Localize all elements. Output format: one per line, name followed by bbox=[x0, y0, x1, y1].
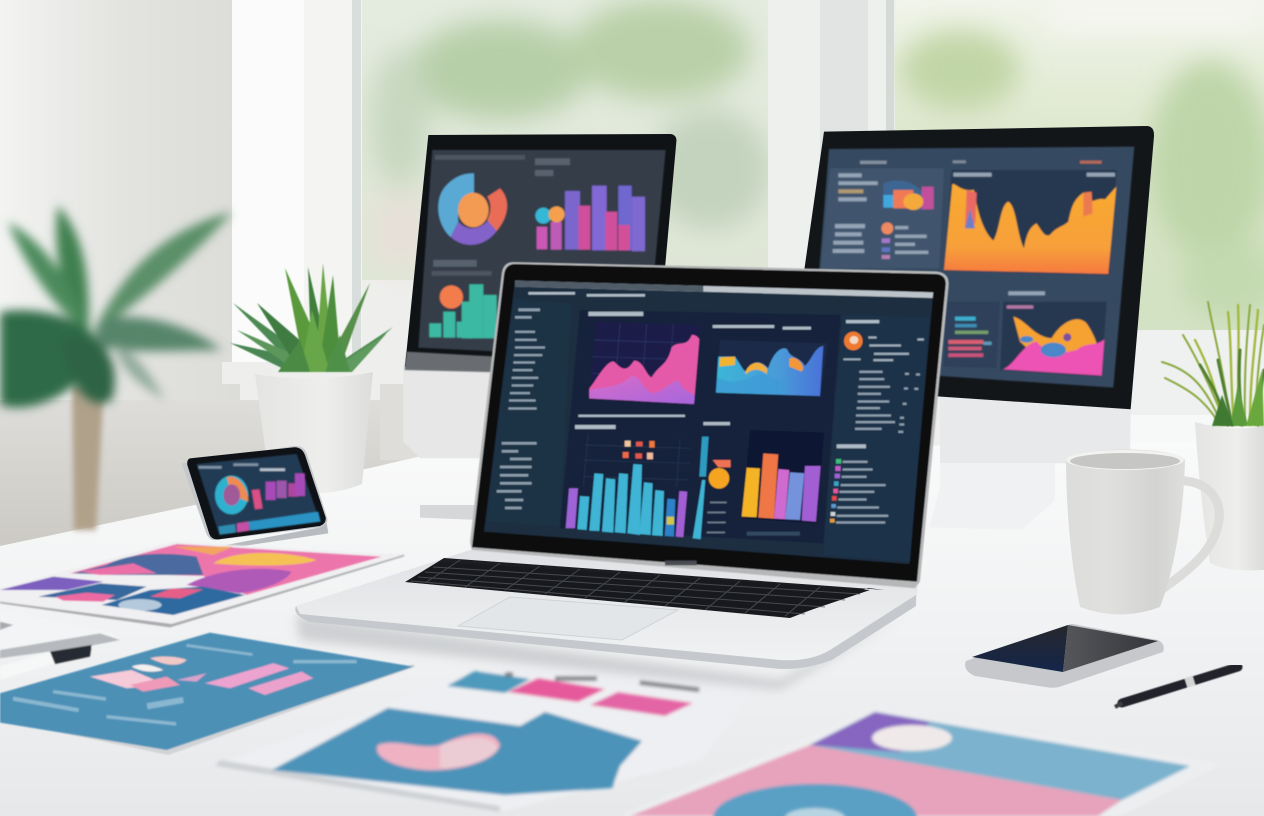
pink area chart bbox=[589, 322, 701, 404]
pink and orange blob chart bbox=[1003, 317, 1104, 376]
multicolour bar chart bbox=[742, 430, 824, 536]
orange area chart bbox=[944, 184, 1116, 274]
plant: thin-bladed plant on the right, in a white pot bbox=[1162, 302, 1264, 570]
tablet donut bbox=[215, 476, 248, 514]
mini colourful chart bbox=[881, 181, 934, 259]
browser bar bbox=[515, 281, 933, 298]
plant: spiky plant in white pot bbox=[230, 263, 393, 493]
bar chart with bubbles bbox=[535, 186, 645, 251]
tablet screen bbox=[197, 454, 321, 535]
screen panel bbox=[484, 281, 933, 564]
monitor: centre-left desktop screen bbox=[403, 134, 676, 520]
data list bbox=[855, 371, 920, 433]
main dark panel bbox=[560, 310, 841, 543]
print: colourful report sheet bbox=[0, 542, 405, 627]
monitor chin bbox=[405, 352, 497, 372]
brand plate bbox=[665, 561, 697, 565]
header labels bbox=[528, 292, 879, 448]
print: white sheet with pink cards and blue panel bbox=[215, 654, 760, 812]
tablet bars bbox=[252, 473, 305, 509]
right panel bbox=[823, 315, 929, 562]
background: window frames and sill bbox=[222, 0, 1264, 460]
small bars list bbox=[948, 317, 992, 357]
print: blue report sheet bbox=[0, 633, 415, 755]
laptop base bbox=[295, 550, 918, 669]
monitor screen bbox=[819, 147, 1134, 388]
sidebar bbox=[487, 298, 572, 527]
smartphone bbox=[965, 624, 1164, 688]
plant: large blurred palm on the left bbox=[0, 205, 232, 530]
teal bars with bubble bbox=[429, 284, 497, 338]
profile card bbox=[843, 332, 924, 361]
notebook and pen at the left edge bbox=[0, 610, 120, 680]
icon list bbox=[830, 459, 888, 524]
phone screen bbox=[972, 625, 1158, 672]
desk bbox=[0, 440, 1264, 816]
monitor bezel bbox=[803, 126, 1154, 409]
monitor: right desktop screen bbox=[803, 126, 1154, 530]
trackpad bbox=[458, 597, 678, 640]
laptop shadow bbox=[295, 615, 905, 690]
narrow widget with orange circle bbox=[693, 437, 731, 539]
laptop lid and screen bbox=[470, 262, 949, 588]
pen on the desk bbox=[1115, 667, 1238, 707]
print: pink, blue and purple sheet bbox=[620, 708, 1222, 816]
donut chart bbox=[438, 173, 507, 245]
blue area chart bbox=[716, 340, 827, 397]
background: right window with blurred greenery bbox=[895, 0, 1264, 332]
background: left window with blurred greenery bbox=[360, 0, 770, 280]
coffee mug bbox=[1066, 450, 1219, 614]
laptop bbox=[295, 262, 949, 690]
monitor screen bbox=[418, 150, 666, 352]
keyboard bbox=[405, 558, 885, 618]
monitor foot bbox=[930, 463, 1055, 530]
monitor neck panel bbox=[940, 397, 1131, 463]
monitor bezel bbox=[405, 134, 676, 367]
tablet on stand bbox=[182, 446, 328, 550]
monitor stand bbox=[403, 365, 497, 458]
vertical bar chart bbox=[566, 433, 692, 537]
monitor foot bbox=[420, 505, 480, 520]
